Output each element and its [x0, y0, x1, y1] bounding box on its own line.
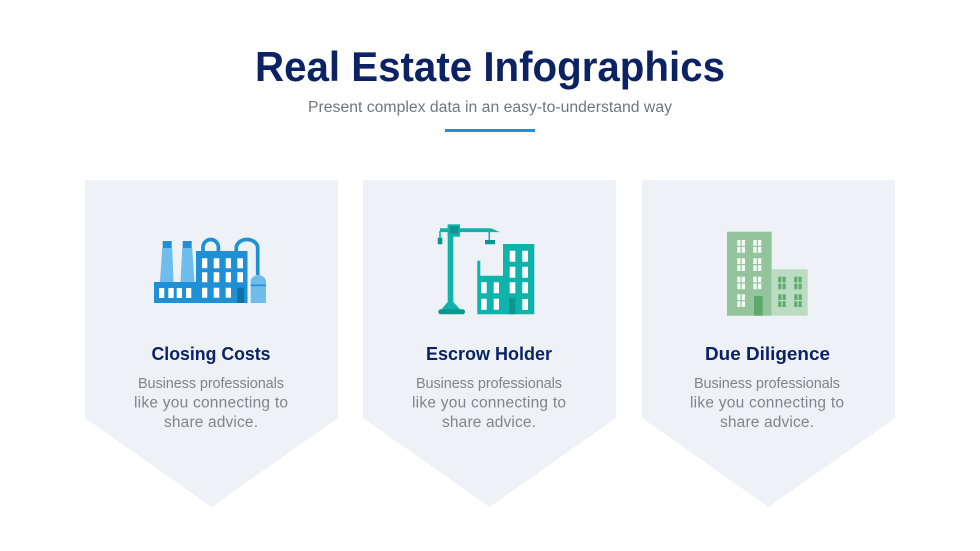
- text: due diligence description: like you connecting to: [690, 394, 844, 412]
- icon: crane and building: [438, 224, 534, 314]
- text: due diligence description: Business professionals: [694, 376, 840, 392]
- text: escrow holder description: [412, 376, 566, 431]
- panel: due diligence: [642, 180, 895, 507]
- icon: factory: [154, 240, 266, 303]
- title underline: [445, 129, 535, 132]
- text: closing costs description: Business professionals: [138, 376, 284, 392]
- icon: office buildings: [727, 232, 808, 316]
- text: escrow holder description: Business professionals: [416, 376, 562, 392]
- card background: escrow holder: [363, 180, 616, 507]
- text: closing costs description: like you connecting to: [134, 394, 288, 412]
- panel: closing costs: [85, 180, 338, 507]
- heading: closing costs: Closing Costs: [152, 343, 270, 364]
- panel: escrow holder: [363, 180, 616, 507]
- text: closing costs description: [134, 376, 288, 431]
- card background: due diligence: [642, 180, 895, 507]
- heading: escrow holder: Escrow Holder: [426, 343, 552, 364]
- heading: due diligence: Due Diligence: [705, 343, 830, 364]
- text: closing costs description: share advice.: [164, 414, 258, 431]
- subtitle: Present complex data in an easy-to-understand way: [308, 99, 672, 116]
- text: escrow holder description: share advice.: [442, 414, 536, 431]
- card background: closing costs: [85, 180, 338, 507]
- text: due diligence description: share advice.: [720, 414, 814, 431]
- text: escrow holder description: like you connecting to: [412, 394, 566, 412]
- text: due diligence description: [690, 376, 844, 431]
- title: Real Estate Infographics: [255, 43, 725, 90]
